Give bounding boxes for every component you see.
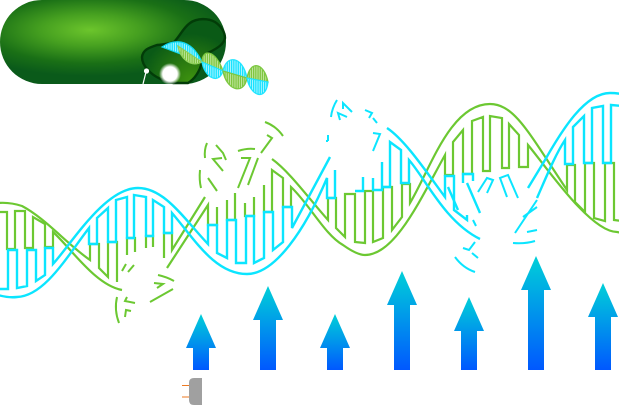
arrow 7 (588, 283, 618, 370)
inner cell bulge (142, 19, 225, 83)
broken DNA fragments, cyan, lower right (455, 175, 537, 272)
arrow 5 (454, 297, 484, 370)
broken DNA fragments, green, upper (200, 122, 283, 191)
small DNA leaving the bacterium (162, 42, 268, 94)
arrow 3 (320, 314, 350, 370)
arrow 4 (387, 271, 417, 370)
arrow 6 (521, 256, 551, 370)
icon: lamp end cap with pins (182, 378, 202, 405)
glow spot (159, 63, 181, 85)
broken DNA fragments, cyan, upper (326, 100, 380, 151)
arrow 2 (253, 286, 283, 370)
probe line and dot (143, 68, 149, 84)
bacterium cell (0, 0, 226, 85)
large DNA helix: cyan strand (0, 93, 619, 297)
broken DNA fragments, green, lower left (116, 264, 174, 323)
large DNA helix: green strand (0, 104, 619, 290)
arrow 1 (186, 314, 216, 370)
